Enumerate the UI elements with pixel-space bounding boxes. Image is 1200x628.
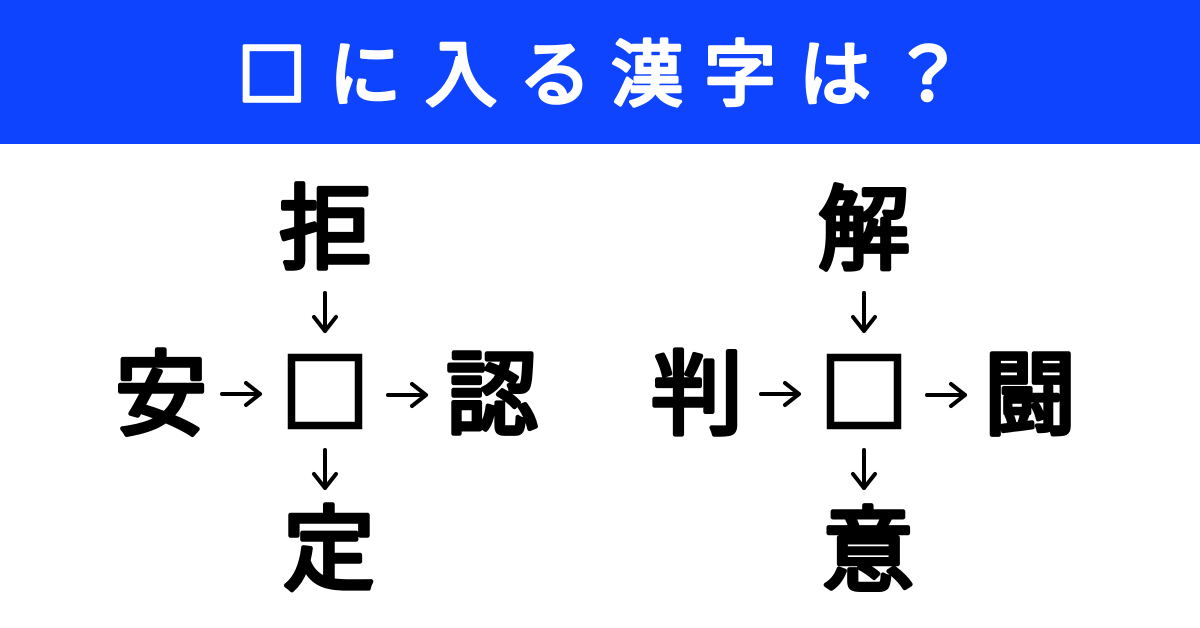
blank box xyxy=(292,358,358,426)
arrow: centre to right xyxy=(927,384,965,406)
kanji left: 判: 判 xyxy=(651,345,743,447)
arrow: centre to bottom xyxy=(853,450,875,488)
title banner xyxy=(0,0,1200,144)
title text: に入る漢字は？ xyxy=(329,36,964,116)
kanji left: 安: 安 xyxy=(115,345,207,447)
kanji bottom: 定: 定 xyxy=(283,500,375,602)
kanji right: 闘: 闘 xyxy=(984,345,1076,447)
arrow: top to centre xyxy=(314,293,336,331)
panel: right puzzle xyxy=(651,180,1076,603)
blank box xyxy=(830,358,898,426)
arrow: left to centre xyxy=(761,383,799,405)
arrow: top to centre xyxy=(853,293,875,331)
arrow: left to centre xyxy=(222,383,260,405)
panel: left puzzle xyxy=(115,179,538,602)
kanji top: 解: 解 xyxy=(818,180,910,282)
kanji right: 認: 認 xyxy=(446,345,538,447)
title text: □ xyxy=(244,19,300,121)
kanji top: 拒: 拒 xyxy=(279,179,371,281)
arrow: centre to right xyxy=(388,384,426,406)
kanji bottom: 意: 意 xyxy=(822,501,914,603)
arrow: centre to bottom xyxy=(314,450,336,488)
